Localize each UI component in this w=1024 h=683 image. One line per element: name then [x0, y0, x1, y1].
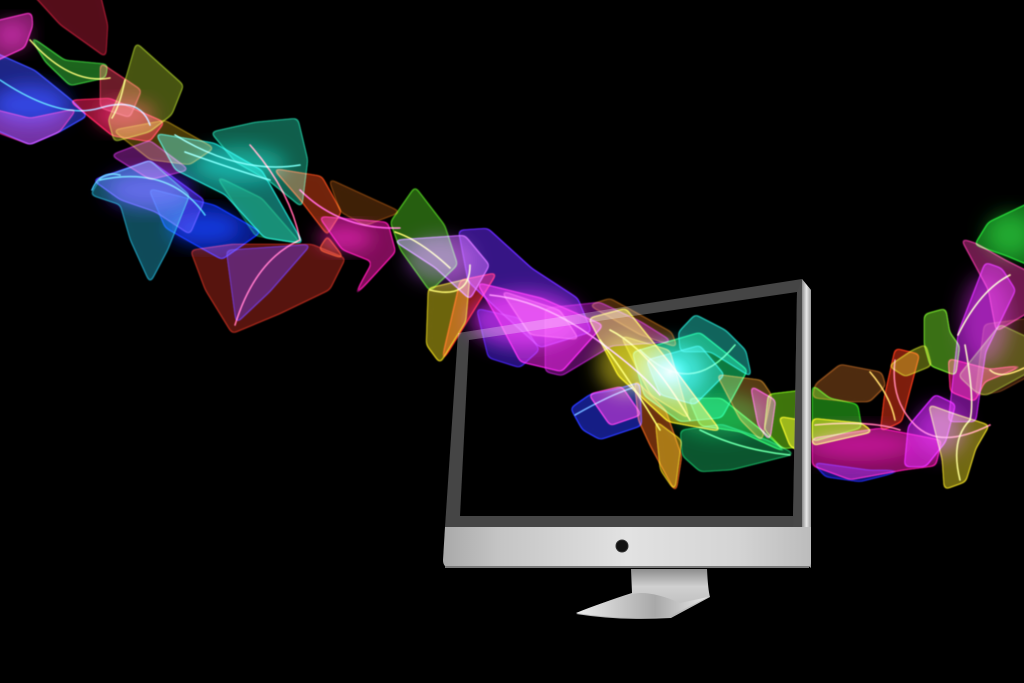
monitor stand	[576, 569, 710, 619]
ribbon: left section	[0, 0, 402, 334]
ribbon: right section	[812, 202, 1024, 490]
ribbon: soft colour glow	[0, 21, 1024, 461]
monitor right bezel	[793, 279, 811, 568]
glow: cyan core	[638, 344, 706, 400]
monitor chin	[443, 527, 811, 568]
monitor frame	[445, 279, 811, 527]
icon: camera dot	[616, 540, 628, 552]
ribbon: middle section	[390, 186, 802, 494]
